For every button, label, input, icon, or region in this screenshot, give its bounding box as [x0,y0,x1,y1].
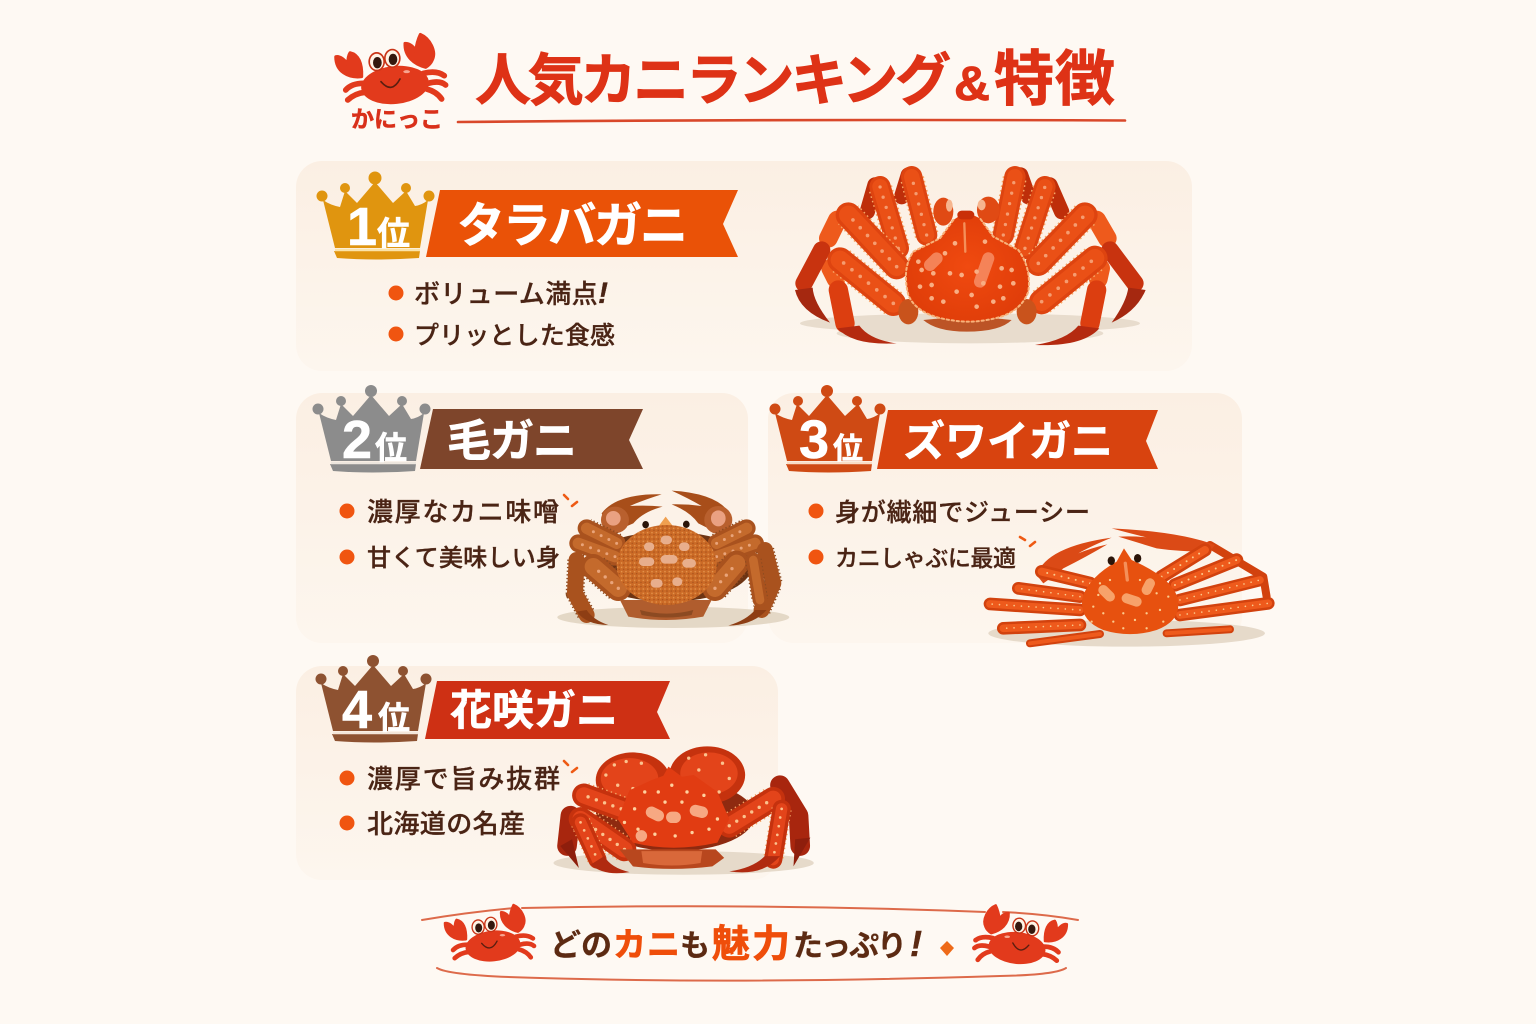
ribbon: 花咲ガニ: 花咲ガニ [450,687,618,734]
ribbon: タラバガニ [426,190,738,257]
footer message: たっぷり [793,930,907,963]
crown: 2位: 2 [342,410,372,470]
footer message: 魅力 [712,924,790,966]
panel 4 background [296,666,778,880]
title: 特徴 [994,46,1115,113]
feature list [808,499,1090,571]
feature list: 濃厚で旨み抜群 [367,764,560,794]
crown: 3位 [770,385,886,472]
title: 人気カニランキング [475,49,951,112]
feature list: 甘くて美味しい身 [367,545,560,572]
footer mascot left [445,905,534,964]
footer frame lines [422,906,1078,981]
feature list [340,764,560,839]
feature list: 身が繊細でジューシー [835,499,1090,527]
footer mascot right [974,905,1067,967]
feature list: 北海道の名産 [367,809,525,839]
ribbon: ズワイガニ: ズワイガニ [903,418,1113,465]
footer message: カニ [613,926,680,963]
title underline [458,120,1125,122]
crown: 1位 [316,172,434,260]
ribbon: 花咲ガニ [425,681,670,739]
title: & [954,58,990,111]
crab illustration: ズワイガニ [988,528,1268,647]
accent ticks [1020,537,1035,546]
panel 1 background [296,161,1192,371]
title [475,46,1115,113]
ribbon: タラバガニ: タラバガニ [457,200,688,253]
feature list [388,277,615,350]
logo: かにっこ crab mascot: かにっこ [351,106,443,132]
accent ticks [564,761,577,772]
ribbon: 毛ガニ [420,409,643,469]
panel 2 background [296,393,748,643]
footer message: ! [910,923,922,964]
footer message: どの [550,928,612,963]
crown: 2位 [312,385,430,472]
panel 3 background [768,393,1242,643]
crown: 1位: 1 [347,197,377,257]
crown: 4位 [316,655,432,742]
feature list [340,497,560,572]
crown: 4位: 4 [342,680,372,740]
feature list: 濃厚なカニ味噌 [367,497,559,527]
crown: 1位: 位 [377,215,410,252]
panel: rank 2 毛ガニ [296,385,789,643]
footer banner [422,905,1078,981]
feature list: プリッとした食感 [414,322,615,350]
ribbon: 毛ガニ: 毛ガニ [447,417,577,466]
feature list: ボリューム満点! [414,277,608,310]
footer message: も [680,930,710,963]
panel: rank 4 花咲ガニ [296,655,814,880]
crown: 3位: 位 [833,433,863,466]
crab illustration: 毛ガニ [557,491,789,628]
crown: 4位: 位 [378,700,410,736]
panel: rank 3 ズワイガニ [768,385,1268,647]
crown: 3位: 3 [799,410,829,470]
logo: かにっこ crab mascot [336,34,446,132]
accent ticks [564,495,577,506]
feature list: カニしゃぶに最適 [835,545,1016,571]
crab illustration: 花咲ガニ [554,746,814,875]
icon: diamond [940,941,954,956]
crab illustration: タラバガニ [795,175,1146,345]
ribbon: ズワイガニ [877,410,1158,469]
footer message [550,923,922,966]
crown: 2位: 位 [375,430,407,466]
panel: rank 1 タラバガニ [296,161,1192,371]
